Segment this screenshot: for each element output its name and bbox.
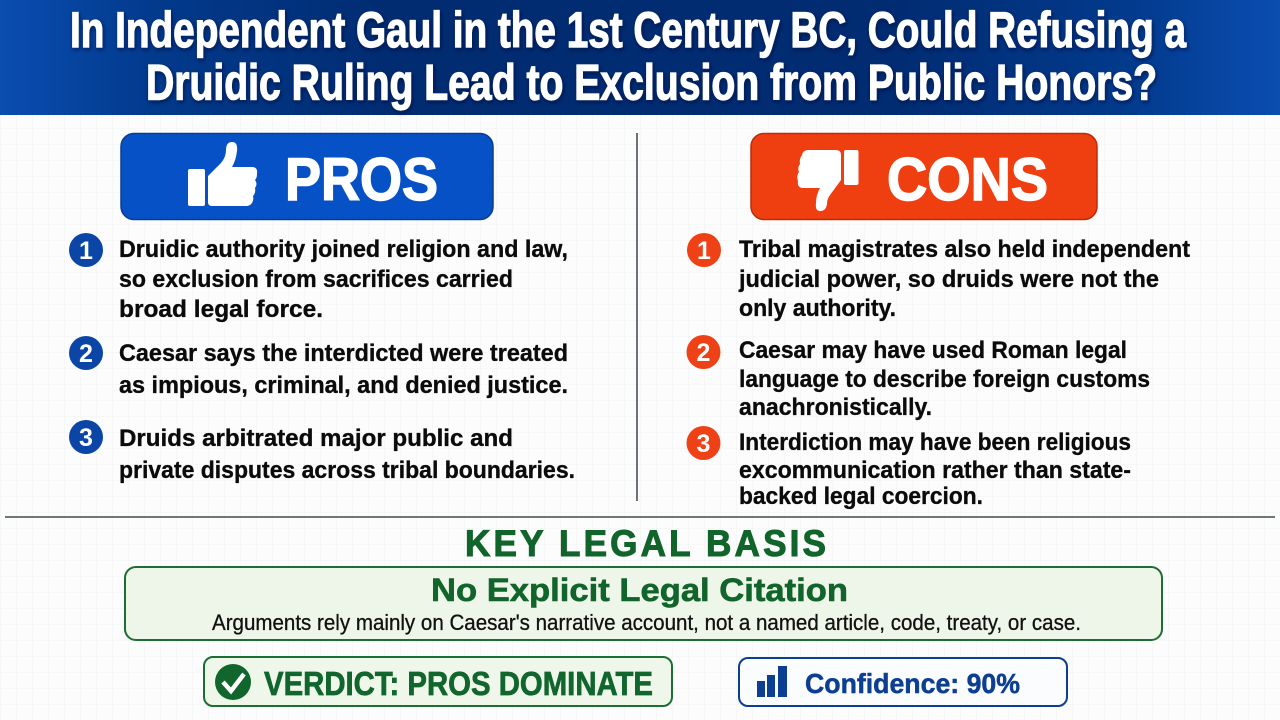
cons item 3: excommunication rather than state-	[739, 457, 1131, 484]
cons item 3: Interdiction may have been religious	[739, 429, 1131, 456]
legal basis description: Arguments rely mainly on Caesar's narrative account, not a named article, code, treaty, or case.	[212, 610, 1081, 635]
header banner	[0, 0, 1280, 115]
cons item 3: 3	[697, 430, 710, 458]
cons item 1: only authority.	[739, 295, 896, 322]
pros item 1: Druidic authority joined religion and law,	[119, 236, 568, 263]
pros item 3: private disputes across tribal boundaries.	[119, 457, 575, 484]
cons item 2	[686, 335, 1150, 421]
confidence text: Confidence: 90%	[805, 668, 1020, 699]
verdict badge	[204, 657, 672, 706]
confidence badge	[739, 658, 1067, 706]
icon: thumbs down	[797, 150, 858, 211]
panel: pros	[69, 134, 575, 484]
pros item 1: broad legal force.	[119, 296, 323, 323]
panel: legal basis	[125, 567, 1162, 640]
icon: thumbs up	[188, 142, 257, 206]
cons item 3: backed legal coercion.	[739, 483, 983, 510]
cons item 2: 2	[697, 339, 710, 367]
pros item 2	[69, 336, 568, 399]
cons item 3	[686, 426, 1131, 510]
legal basis title: No Explicit Legal Citation	[431, 572, 848, 608]
pros item 1	[69, 233, 568, 323]
cons badge	[751, 134, 1097, 220]
verdict text: VERDICT: PROS DOMINATE	[264, 665, 653, 702]
icon: check	[215, 664, 251, 700]
center divider	[636, 133, 638, 501]
pros item 1: so exclusion from sacrifices carried	[119, 266, 513, 293]
horizontal divider	[5, 516, 1275, 518]
cons item 1	[687, 233, 1190, 322]
panel: cons	[686, 134, 1190, 510]
pros badge	[121, 134, 493, 220]
cons item 1: judicial power, so druids were not the	[738, 266, 1159, 293]
pros item 3	[69, 420, 575, 484]
cons label: CONS	[887, 146, 1048, 213]
pros item 1: 1	[79, 237, 93, 265]
cons item 1: 1	[697, 237, 711, 265]
pros item 2: as impious, criminal, and denied justice.	[119, 372, 568, 399]
cons item 1: Tribal magistrates also held independent	[739, 236, 1190, 263]
pros item 3: Druids arbitrated major public and	[119, 425, 513, 452]
pros item 3: 3	[79, 424, 93, 452]
cons item 2: anachronistically.	[739, 394, 932, 421]
title	[70, 2, 1187, 110]
key legal basis heading: KEY LEGAL BASIS	[465, 522, 826, 564]
cons item 2: language to describe foreign customs	[739, 366, 1150, 393]
pros item 2: 2	[79, 340, 93, 368]
pros item 2: Caesar says the interdicted were treated	[119, 340, 568, 367]
pros label: PROS	[285, 146, 438, 213]
cons item 2: Caesar may have used Roman legal	[739, 337, 1127, 364]
icon: bar chart	[757, 666, 787, 697]
